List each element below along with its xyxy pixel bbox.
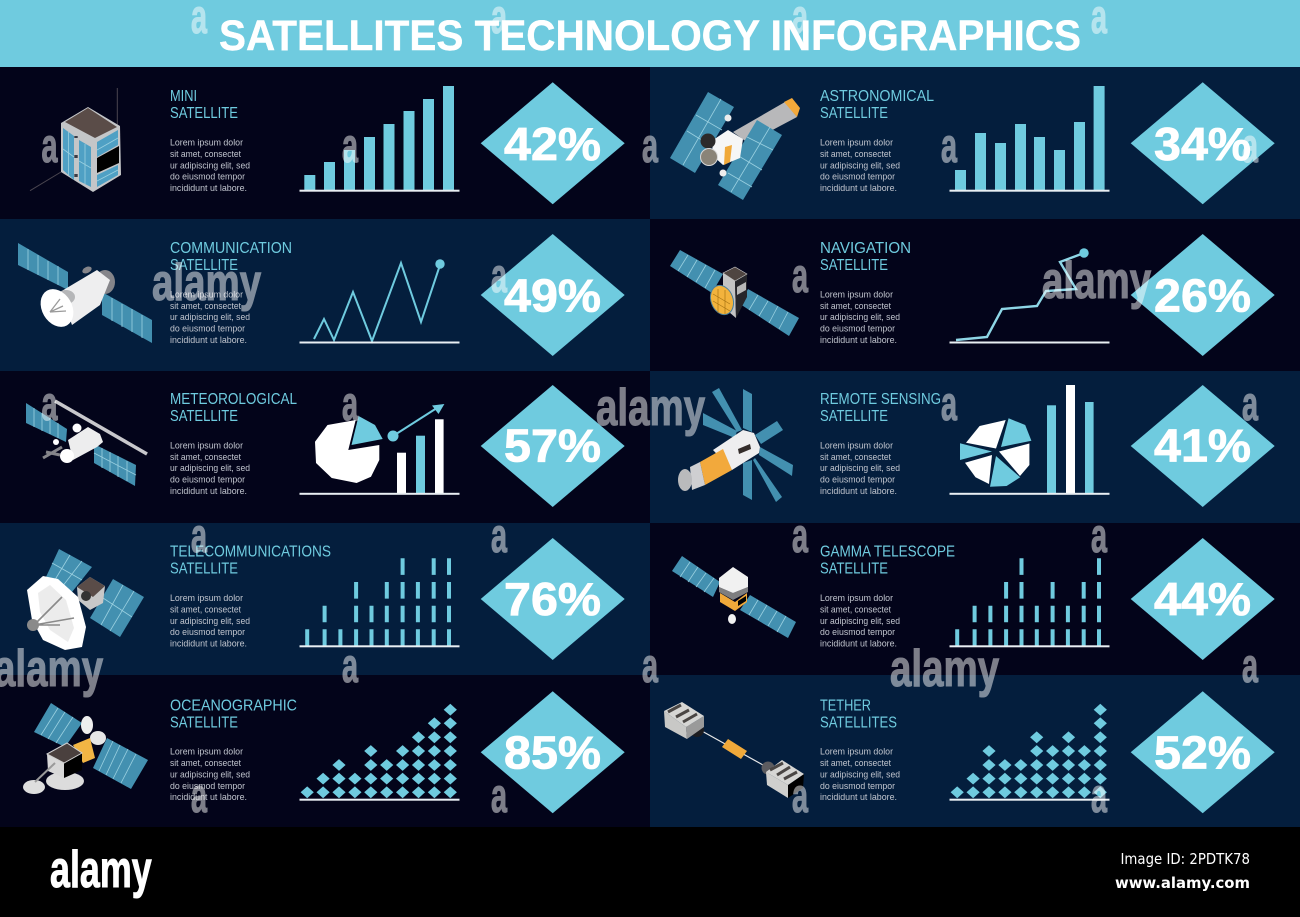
text block: sit amet, consectet [170, 605, 241, 616]
watermark overlay: alamy [890, 639, 1000, 697]
text block: ur adipiscing elit, sed [820, 770, 900, 780]
text block: Lorem ipsum dolor [170, 138, 243, 149]
icon: navigation satellite [670, 250, 799, 336]
text block: do eiusmod tempor [820, 627, 895, 638]
text block: incididunt ut labore. [820, 335, 897, 346]
percentage diamond: 49% [504, 270, 601, 322]
panel: telecommunications satellite [0, 523, 650, 675]
panel: mini satellite [0, 67, 650, 219]
panel: meteorological satellite [0, 371, 650, 523]
text block: incididunt ut labore. [170, 183, 247, 194]
text block: ur adipiscing elit, sed [820, 616, 900, 627]
percentage diamond: 34% [1154, 118, 1251, 170]
percentage diamond [1131, 82, 1275, 204]
text block [170, 593, 250, 650]
text block [170, 138, 250, 194]
text block: ur adipiscing elit, sed [170, 160, 250, 171]
watermark overlay: alamy [596, 378, 706, 436]
text block: incididunt ut labore. [170, 792, 247, 803]
text block: sit amet, consectet [820, 452, 891, 463]
icon: communication satellite [18, 243, 152, 343]
watermark overlay: a [1242, 378, 1259, 431]
icon: mini satellite [30, 88, 121, 192]
watermark overlay: alamy [152, 253, 262, 311]
text block: do eiusmod tempor [820, 172, 895, 183]
icon: oceanographic satellite [23, 703, 148, 794]
watermark overlay: a [1242, 120, 1259, 173]
footer bar [0, 827, 1300, 917]
icon: remote sensing satellite [678, 388, 793, 502]
heading: SATELLITE [820, 105, 888, 122]
pie and bar chart with arrow [300, 404, 460, 495]
text block: sit amet, consectet [170, 301, 241, 312]
watermark overlay: a [191, 510, 208, 563]
text block: Lorem ipsum dolor [820, 747, 893, 758]
panel: gamma telescope satellite [650, 523, 1300, 675]
heading: TETHER [820, 698, 871, 715]
percentage diamond [481, 234, 625, 356]
watermark overlay: a [1242, 640, 1259, 693]
heading: REMOTE SENSING [820, 391, 941, 408]
heading [170, 88, 238, 122]
heading: METEOROLOGICAL [170, 391, 297, 408]
text block: do eiusmod tempor [820, 475, 895, 486]
text block: incididunt ut labore. [820, 639, 897, 650]
text block [820, 593, 900, 650]
text block [170, 747, 250, 803]
text block [820, 138, 900, 194]
text block: Lorem ipsum dolor [170, 747, 243, 758]
watermark overlay: a [491, 250, 508, 303]
text block: ur adipiscing elit, sed [820, 160, 900, 171]
percentage diamond: 76% [504, 573, 601, 625]
watermark overlay: a [342, 378, 359, 431]
segmented bar chart [300, 558, 460, 647]
watermark overlay: a [491, 510, 508, 563]
heading: COMMUNICATION [170, 240, 292, 257]
text block: incididunt ut labore. [820, 183, 897, 194]
percentage diamond [1131, 538, 1275, 660]
text block: do eiusmod tempor [170, 627, 245, 638]
diamond pictogram chart [300, 704, 460, 801]
text block: ur adipiscing elit, sed [820, 312, 900, 323]
heading: SATELLITES [820, 715, 897, 732]
image id: Image ID: 2PDTK78 [1120, 850, 1250, 868]
text block: do eiusmod tempor [820, 781, 895, 792]
heading: OCEANOGRAPHIC [170, 698, 297, 715]
text block: incididunt ut labore. [820, 486, 897, 497]
bar chart [300, 86, 460, 192]
heading [820, 88, 934, 122]
heading: TELECOMMUNICATIONS [170, 544, 331, 561]
text block: Lorem ipsum dolor [170, 290, 243, 300]
heading [170, 544, 331, 578]
panel: remote sensing satellite [650, 371, 1300, 523]
text block: ur adipiscing elit, sed [170, 463, 250, 474]
text block: sit amet, consectet [170, 149, 241, 160]
heading: SATELLITE [170, 408, 238, 425]
text block: Lorem ipsum dolor [820, 138, 893, 149]
panel: oceanographic satellite [0, 675, 650, 827]
heading: ASTRONOMICAL [820, 88, 934, 105]
text block: ur adipiscing elit, sed [820, 463, 900, 474]
text block: incididunt ut labore. [820, 792, 897, 803]
text block: incididunt ut labore. [170, 335, 247, 346]
text block [820, 440, 900, 497]
percentage diamond [481, 691, 625, 813]
text block: Lorem ipsum dolor [820, 593, 893, 604]
text block: ur adipiscing elit, sed [170, 770, 250, 780]
text block: do eiusmod tempor [820, 324, 895, 334]
heading: GAMMA TELESCOPE [820, 544, 955, 561]
line chart [300, 259, 460, 344]
heading: SATELLITE [170, 257, 238, 274]
bar chart [950, 86, 1110, 192]
text block: sit amet, consectet [820, 605, 891, 616]
heading: SATELLITE [170, 715, 238, 732]
diamond pictogram chart [950, 704, 1110, 801]
watermark overlay: a [941, 120, 958, 173]
watermark overlay: a [42, 120, 58, 173]
heading: SATELLITE [170, 105, 238, 122]
percentage diamond: 57% [504, 420, 601, 472]
text block: do eiusmod tempor [170, 475, 245, 486]
watermark overlay: a [642, 120, 659, 173]
percentage diamond: 52% [1154, 726, 1251, 778]
text block [820, 290, 900, 346]
title: SATELLITES TECHNOLOGY INFOGRAPHICS [219, 12, 1081, 60]
line chart [950, 248, 1110, 344]
percentage diamond: 41% [1154, 420, 1251, 472]
heading [170, 698, 297, 732]
text block: Lorem ipsum dolor [820, 290, 893, 300]
text block [170, 290, 250, 346]
panel: navigation satellite [650, 219, 1300, 371]
icon: telecommunications satellite [27, 549, 144, 650]
watermark overlay: a [642, 640, 659, 693]
watermark overlay: a [491, 770, 508, 823]
text block: ur adipiscing elit, sed [170, 616, 250, 627]
percentage diamond [481, 82, 625, 204]
watermark overlay: a [941, 378, 958, 431]
text block: do eiusmod tempor [170, 781, 245, 792]
watermark overlay: a [191, 770, 208, 823]
text block: sit amet, consectet [170, 452, 241, 463]
text block: sit amet, consectet [820, 301, 891, 312]
watermark overlay: a [792, 770, 809, 823]
percentage diamond [1131, 234, 1275, 356]
panel: communication satellite [0, 219, 650, 371]
percentage diamond: 85% [504, 726, 601, 778]
percentage diamond [481, 538, 625, 660]
text block: incididunt ut labore. [170, 639, 247, 650]
watermark overlay: a [1091, 770, 1108, 823]
watermark overlay: a [342, 640, 359, 693]
heading [820, 391, 941, 425]
text block [820, 747, 900, 803]
text block: sit amet, consectet [820, 758, 891, 769]
percentage diamond [1131, 385, 1275, 507]
panel: astronomical satellite [650, 67, 1300, 219]
text block [170, 440, 250, 497]
heading: SATELLITE [820, 257, 888, 274]
text block: incididunt ut labore. [170, 486, 247, 497]
percentage diamond [481, 385, 625, 507]
icon: meteorological satellite [26, 401, 147, 486]
heading [170, 240, 292, 274]
watermark overlay: a [42, 378, 58, 431]
heading: SATELLITE [820, 408, 888, 425]
panel: tether satellites [650, 675, 1300, 827]
heading [170, 391, 297, 425]
heading [820, 544, 955, 578]
segmented bar chart [950, 558, 1110, 647]
watermark overlay: a [792, 250, 809, 303]
percentage diamond: 44% [1154, 573, 1251, 625]
percentage diamond: 26% [1154, 270, 1251, 322]
text block: sit amet, consectet [820, 149, 891, 160]
heading [820, 240, 911, 274]
icon: gamma telescope satellite [672, 556, 796, 638]
watermark overlay: a [792, 510, 809, 563]
heading: MINI [170, 88, 197, 105]
heading [820, 698, 897, 732]
text block: do eiusmod tempor [170, 324, 245, 334]
percentage diamond: 42% [504, 118, 601, 170]
text block: Lorem ipsum dolor [820, 440, 893, 451]
exploded pie and bar chart [950, 385, 1110, 495]
website url: www.alamy.com [1115, 874, 1250, 892]
heading: SATELLITE [820, 561, 888, 578]
heading: SATELLITE [170, 561, 238, 578]
header banner [0, 0, 1300, 67]
text block: Lorem ipsum dolor [170, 593, 243, 604]
watermark overlay: a [342, 120, 359, 173]
watermark overlay: alamy [1042, 251, 1152, 309]
footer logo: alamy [50, 842, 152, 899]
text block: ur adipiscing elit, sed [170, 312, 250, 323]
percentage diamond [1131, 691, 1275, 813]
watermark overlay: a [1091, 510, 1108, 563]
heading: NAVIGATION [820, 240, 911, 257]
icon: astronomical satellite [670, 92, 800, 200]
text block: sit amet, consectet [170, 758, 241, 769]
icon: tether satellites [664, 702, 804, 798]
text block: do eiusmod tempor [170, 172, 245, 183]
text block: Lorem ipsum dolor [170, 440, 243, 451]
